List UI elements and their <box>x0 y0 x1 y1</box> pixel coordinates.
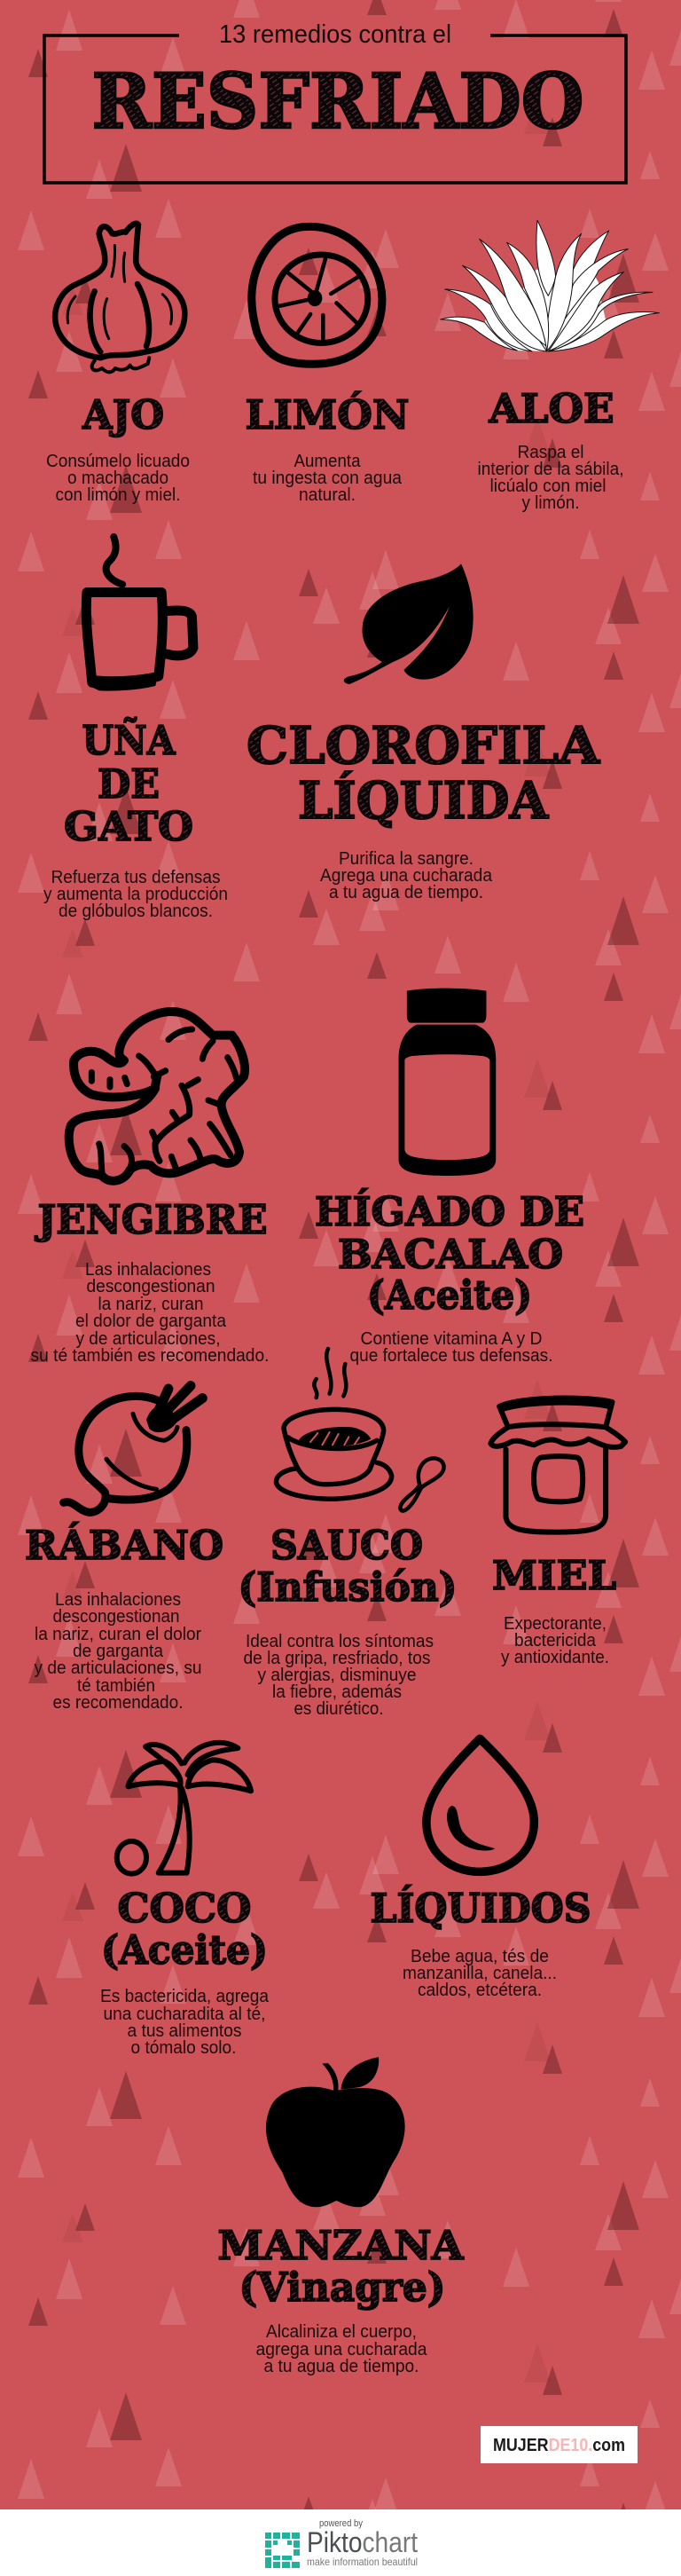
description: Ideal contra los síntomas <box>246 1632 434 1651</box>
description <box>349 1329 553 1366</box>
icon: lemon <box>252 226 382 364</box>
description: o tómalo solo. <box>131 2038 236 2058</box>
description: y limón. <box>521 493 580 513</box>
description: bactericida <box>514 1631 597 1650</box>
heading <box>315 1188 584 1319</box>
description <box>30 1260 270 1366</box>
panel: higado de bacalao <box>315 989 584 1366</box>
heading: JENGIBRE <box>35 1196 268 1243</box>
description: a tus alimentos <box>128 2021 241 2041</box>
icon: piktochart logo <box>265 2533 300 2568</box>
panel: jengibre <box>30 1012 270 1366</box>
description: agrega una cucharada <box>255 2340 427 2359</box>
icon: garlic <box>55 224 184 372</box>
panel: rabano <box>25 1386 223 1713</box>
description: a tu agua de tiempo. <box>264 2357 419 2376</box>
description: el dolor de garganta <box>75 1312 227 1331</box>
heading <box>101 1885 268 1973</box>
description: de glóbulos blancos. <box>59 902 213 921</box>
description: la fiebre, además <box>272 1682 402 1702</box>
description: y de articulaciones, su <box>34 1658 202 1678</box>
title frame <box>44 35 626 183</box>
logo: mujerde10 <box>481 2426 638 2463</box>
heading: BACALAO <box>338 1231 563 1278</box>
description: una cucharadita al té, <box>103 2005 266 2024</box>
description: Las inhalaciones <box>85 1260 211 1280</box>
description: su té también es recomendado. <box>30 1346 270 1366</box>
description: la nariz, curan el dolor <box>35 1625 201 1644</box>
description: manzanilla, canela... <box>403 1964 557 1983</box>
icon: ginger <box>69 1012 245 1181</box>
description <box>255 2322 427 2376</box>
description: Es bactericida, agrega <box>100 1987 270 2006</box>
icon: mug <box>86 537 193 691</box>
icon: honey jar <box>490 1398 625 1532</box>
description <box>501 1614 609 1667</box>
description: natural. <box>299 485 356 505</box>
panel: aloe <box>441 220 659 513</box>
description: Purifica la sangre. <box>339 849 474 869</box>
tagline: make information beautiful <box>307 2556 418 2568</box>
description: interior de la sábila, <box>477 460 624 479</box>
icon: radish <box>64 1386 202 1512</box>
footer: powered by piktochart: powered by <box>319 2518 363 2529</box>
footer: powered by piktochart <box>0 2509 681 2576</box>
heading: ALOE <box>488 385 614 432</box>
description <box>46 452 190 505</box>
description: Bebe agua, tés de <box>411 1947 549 1966</box>
description: descongestionan <box>87 1277 215 1296</box>
icon: leaf <box>344 563 474 684</box>
description <box>253 452 403 505</box>
description: Raspa el <box>518 443 583 462</box>
description: descongestionan <box>53 1607 179 1627</box>
panel: limon <box>245 226 410 505</box>
description: de la gripa, resfriado, tos <box>243 1649 431 1668</box>
description: Alcaliniza el cuerpo, <box>266 2322 417 2342</box>
wordmark: Piktochart <box>307 2526 418 2558</box>
description: Contiene vitamina A y D <box>360 1329 543 1349</box>
heading: COCO <box>117 1885 252 1932</box>
description: y antioxidante. <box>501 1648 609 1667</box>
panel: una de gato <box>43 537 228 921</box>
description: Agrega una cucharada <box>320 866 493 886</box>
description: y aumenta la producción <box>43 885 228 904</box>
panel: manzana <box>218 2057 465 2376</box>
panel: ajo <box>46 224 190 505</box>
heading: GATO <box>64 803 193 850</box>
description: licúalo con miel <box>489 477 607 496</box>
heading: (Aceite) <box>367 1272 532 1319</box>
description: y de articulaciones, <box>76 1329 220 1349</box>
description: a tu agua de tiempo. <box>329 883 483 902</box>
description <box>403 1947 557 2000</box>
description: Refuerza tus defensas <box>51 868 220 887</box>
description: y alergias, disminuye <box>257 1666 417 1685</box>
panel: clorofila liquida <box>247 563 600 902</box>
heading: HÍGADO DE <box>315 1188 584 1235</box>
icon: cup and spoon <box>276 1349 444 1511</box>
icon: bottle <box>399 989 496 1176</box>
subtitle: 13 remedios contra el <box>219 20 451 49</box>
description: Expectorante, <box>504 1614 607 1634</box>
logo: mujerde10: MUJERDE10.com <box>493 2436 625 2455</box>
heading: LIMÓN <box>245 391 410 438</box>
description: de garganta <box>73 1642 164 1661</box>
panel: sauco <box>238 1349 458 1719</box>
heading <box>247 716 600 831</box>
panel: liquidos <box>371 1738 591 2000</box>
heading: UÑA <box>82 717 176 764</box>
description: es recomendado. <box>53 1693 183 1713</box>
description: es diurético. <box>294 1699 383 1719</box>
icon: apple <box>266 2057 405 2207</box>
description: la nariz, curan <box>98 1295 204 1314</box>
icon: palm tree <box>117 1743 251 1874</box>
description: té también <box>77 1676 155 1696</box>
description: Consúmelo licuado <box>46 452 190 471</box>
icon: water drop <box>427 1738 534 1871</box>
description: Aumenta <box>294 452 361 471</box>
description: Las inhalaciones <box>55 1590 181 1610</box>
description <box>100 1987 270 2058</box>
description <box>243 1632 434 1719</box>
title: RESFRIADO <box>92 58 583 146</box>
heading: MIEL <box>492 1552 616 1599</box>
panel: coco <box>100 1743 270 2058</box>
heading <box>218 2222 465 2311</box>
description: tu ingesta con agua <box>253 469 403 488</box>
description: con limón y miel. <box>55 485 181 505</box>
heading: (Aceite) <box>101 1926 268 1973</box>
heading: (Infusión) <box>238 1564 458 1611</box>
description: caldos, etcétera. <box>418 1981 542 2000</box>
description <box>43 868 228 921</box>
description: que fortalece tus defensas. <box>349 1346 553 1366</box>
heading: LÍQUIDA <box>298 770 549 831</box>
heading: LÍQUIDOS <box>371 1885 591 1932</box>
heading: (Vinagre) <box>239 2264 445 2311</box>
icon: aloe plant <box>441 220 659 351</box>
heading <box>64 717 193 850</box>
heading: AJO <box>82 391 164 438</box>
heading: SAUCO <box>270 1522 423 1569</box>
description: o machacado <box>67 469 168 488</box>
description <box>477 443 624 513</box>
heading: CLOROFILA <box>247 716 600 776</box>
panel: miel <box>490 1398 625 1667</box>
description <box>320 849 493 902</box>
heading <box>238 1522 458 1611</box>
heading: DE <box>98 760 160 807</box>
heading: MANZANA <box>218 2222 465 2269</box>
description <box>34 1590 202 1713</box>
heading: RÁBANO <box>25 1522 223 1569</box>
